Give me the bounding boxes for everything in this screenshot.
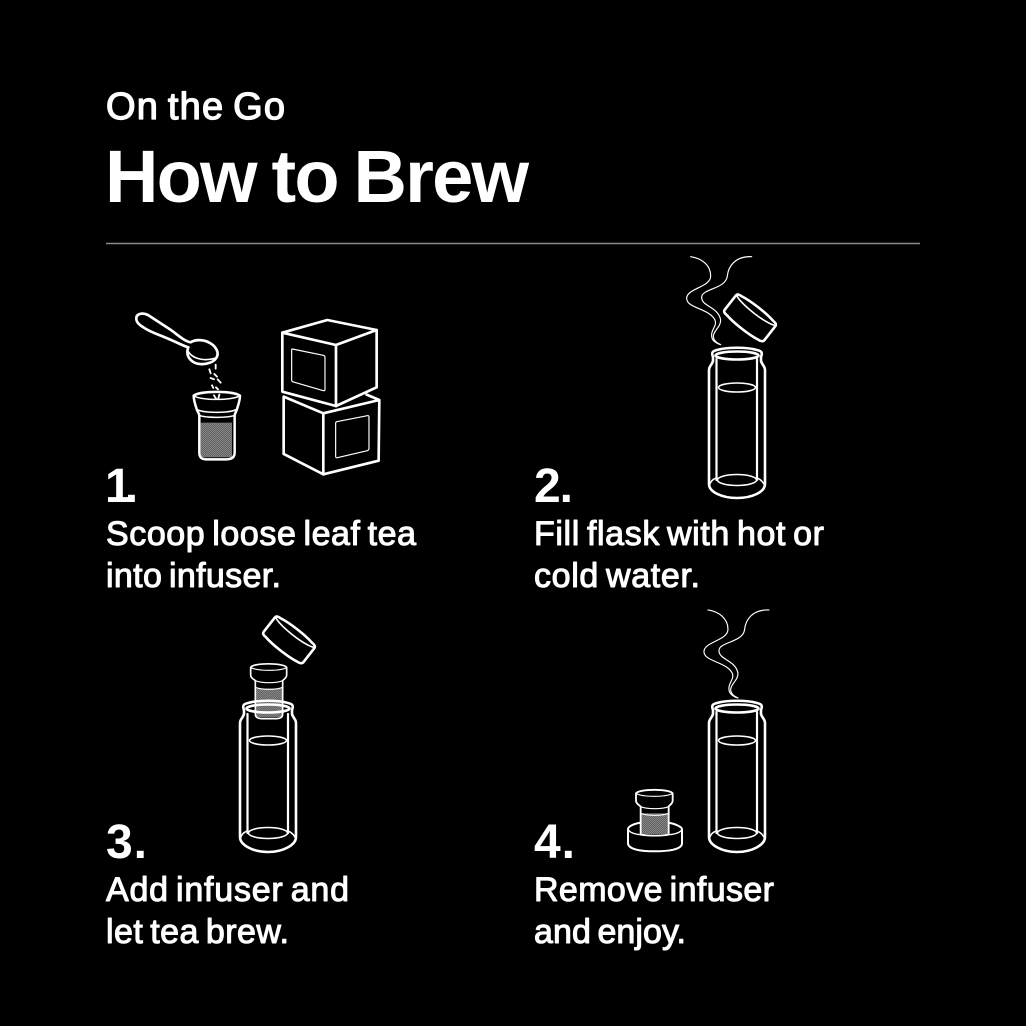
panel: step 1 — [105, 314, 416, 595]
icon: steam — [687, 257, 752, 345]
step number 1: 1. — [105, 460, 138, 513]
step text 3: let tea brew. — [106, 913, 289, 951]
step text 3 — [106, 871, 349, 951]
step text 1 — [106, 515, 416, 595]
icon: flask lid — [261, 614, 317, 666]
icon: steam — [704, 610, 769, 698]
step text 1: Scoop loose leaf tea — [106, 515, 416, 553]
panel: step 2 — [534, 257, 824, 595]
icon: flask — [240, 701, 296, 852]
panel: step 3 — [106, 614, 349, 951]
subtitle: On the Go — [106, 86, 285, 128]
step text 4: Remove infuser — [534, 871, 774, 909]
icon: falling tea leaves — [209, 365, 221, 399]
step text 3: Add infuser and — [106, 871, 349, 909]
panel: step 4 — [534, 610, 774, 951]
step number 4: 4. — [534, 816, 575, 869]
step text 2: cold water. — [534, 557, 700, 595]
step number 2: 2. — [534, 460, 573, 513]
title: How to Brew — [105, 135, 529, 218]
icon: flask — [709, 348, 765, 498]
step text 4: and enjoy. — [534, 913, 686, 951]
icon: infuser in flask — [251, 664, 287, 719]
icon: stacked tea boxes — [282, 320, 379, 474]
icon: infuser with mesh — [194, 392, 240, 459]
icon: flask lid — [722, 292, 778, 344]
step text 2 — [534, 515, 824, 595]
step number 3: 3. — [106, 816, 147, 869]
step text 2: Fill flask with hot or — [534, 515, 824, 553]
step text 1: into infuser. — [106, 557, 281, 595]
icon: infuser on lid — [628, 790, 682, 851]
step text 4 — [534, 871, 774, 951]
icon: flask — [709, 701, 765, 852]
icon: scoop — [136, 314, 218, 364]
